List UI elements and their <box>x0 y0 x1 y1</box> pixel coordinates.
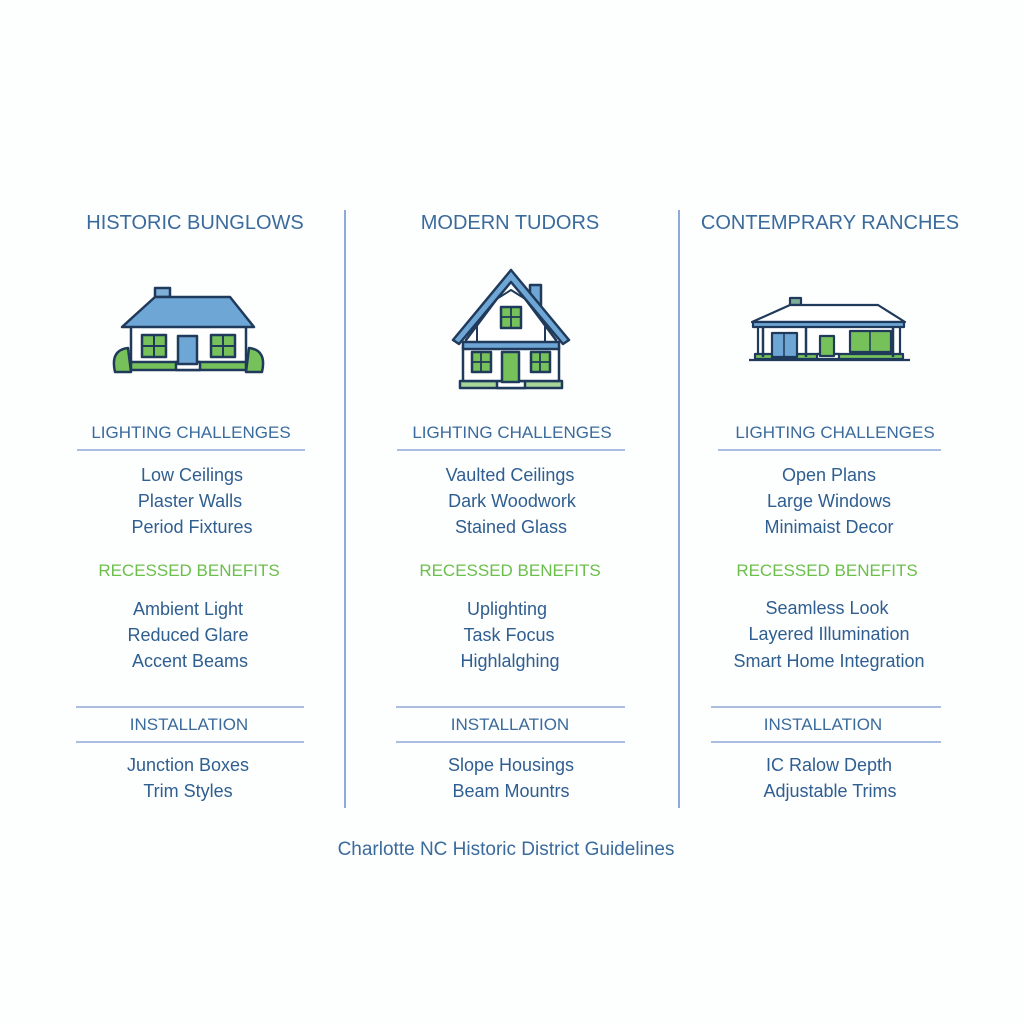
section: recessed benefits: RECESSED BENEFITS <box>419 561 601 580</box>
footer: Charlotte NC Historic District Guidelines <box>338 839 674 860</box>
section: recessed benefits <box>419 561 601 671</box>
icon: ranch house <box>749 298 910 360</box>
section: installation: Trim Styles <box>143 781 233 801</box>
section: lighting challenges: Stained Glass <box>455 517 567 537</box>
section: recessed benefits <box>733 561 925 671</box>
section: installation: Junction Boxes <box>127 755 249 775</box>
section: recessed benefits: Smart Home Integration <box>733 651 925 671</box>
icon: bungalow house <box>114 288 263 372</box>
section: recessed benefits: RECESSED BENEFITS <box>98 561 280 580</box>
heading: modern tudors: MODERN TUDORS <box>421 212 599 234</box>
section: lighting challenges <box>718 423 941 537</box>
section: installation <box>76 707 304 801</box>
section: installation: Beam Mountrs <box>452 781 570 801</box>
section: recessed benefits <box>98 561 280 671</box>
section: recessed benefits: RECESSED BENEFITS <box>736 561 918 580</box>
section: recessed benefits: Highlalghing <box>460 651 560 671</box>
section: recessed benefits: Uplighting <box>467 599 547 619</box>
heading: historic bungalows: HISTORIC BUNGLOWS <box>86 212 304 234</box>
section: lighting challenges <box>77 423 305 537</box>
section: lighting challenges: Dark Woodwork <box>448 491 577 511</box>
column: historic bungalows <box>76 212 305 801</box>
section: lighting challenges: Plaster Walls <box>138 491 242 511</box>
section: recessed benefits: Layered Illumination <box>748 624 910 644</box>
section: lighting challenges: Low Ceilings <box>141 465 243 485</box>
section: lighting challenges: Period Fixtures <box>131 517 253 537</box>
section: recessed benefits: Ambient Light <box>133 599 243 619</box>
section: recessed benefits: Task Focus <box>463 625 555 645</box>
section: lighting challenges: LIGHTING CHALLENGES <box>91 423 291 442</box>
section: recessed benefits: Accent Beams <box>132 651 248 671</box>
section: installation <box>396 707 625 801</box>
section: lighting challenges: Minimaist Decor <box>764 517 894 537</box>
column: modern tudors <box>396 212 625 801</box>
section: installation: Adjustable Trims <box>763 781 897 801</box>
section: lighting challenges: Large Windows <box>767 491 891 511</box>
section: installation: INSTALLATION <box>764 715 882 734</box>
section: installation <box>711 707 941 801</box>
column: contemporary ranches <box>701 212 959 801</box>
section: lighting challenges: Vaulted Ceilings <box>446 465 574 485</box>
section: installation: IC Ralow Depth <box>766 755 892 775</box>
section: lighting challenges: LIGHTING CHALLENGES <box>735 423 935 442</box>
section: installation: Slope Housings <box>448 755 574 775</box>
heading: contemporary ranches: CONTEMPRARY RANCHES <box>701 212 959 234</box>
section: installation: INSTALLATION <box>451 715 569 734</box>
section: lighting challenges: Open Plans <box>782 465 876 485</box>
icon: tudor house <box>453 270 569 388</box>
section: lighting challenges <box>397 423 625 537</box>
section: installation: INSTALLATION <box>130 715 248 734</box>
section: lighting challenges: LIGHTING CHALLENGES <box>412 423 612 442</box>
section: recessed benefits: Reduced Glare <box>127 625 249 645</box>
section: recessed benefits: Seamless Look <box>765 598 890 618</box>
